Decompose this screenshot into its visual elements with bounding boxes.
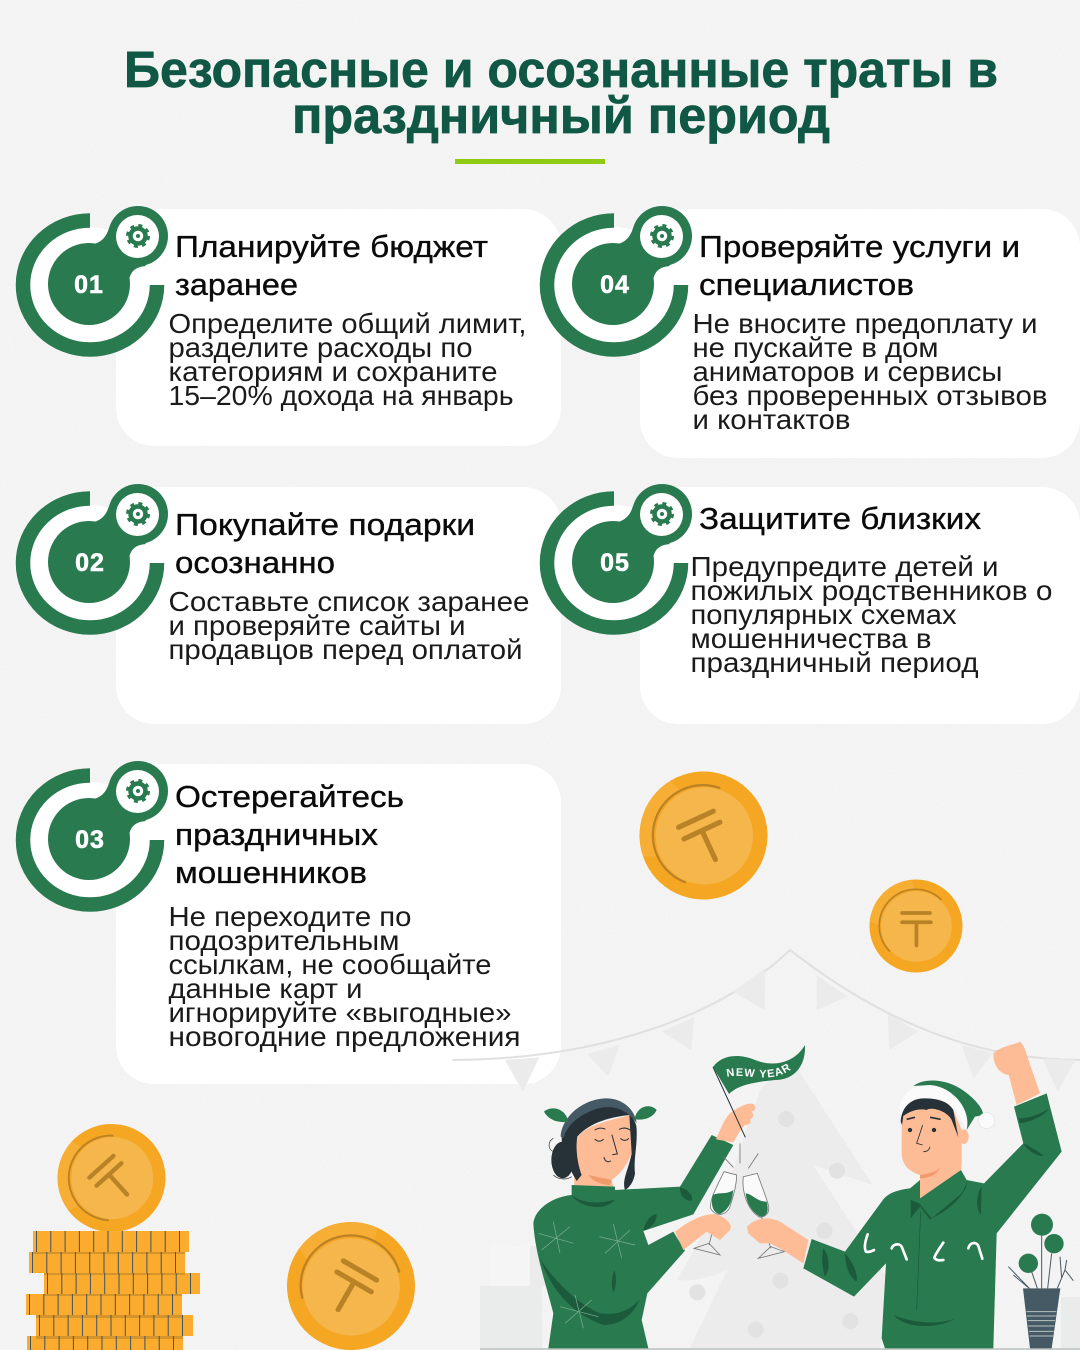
tree — [677, 1060, 888, 1348]
neck and face — [574, 1115, 633, 1187]
tree ornaments — [689, 1111, 858, 1338]
headband — [561, 1098, 637, 1138]
sweater — [533, 1135, 733, 1348]
panel: card 04 — [547, 206, 1080, 458]
heading: card 01: заранее — [175, 267, 298, 302]
text: card 03 body: игнорируйте «выгодные» — [168, 997, 512, 1028]
stems — [1008, 1233, 1073, 1288]
title — [124, 41, 998, 144]
leaves — [1019, 1214, 1064, 1273]
shirt — [803, 1093, 1062, 1348]
icon: coin stack — [26, 1231, 200, 1350]
shirt shadows — [822, 1108, 1049, 1326]
icon: badge 02: 02 — [75, 549, 105, 577]
garland with pennants — [452, 950, 1080, 1092]
text: card 04 body — [692, 308, 1048, 435]
ear leaves — [544, 1106, 657, 1122]
glass — [743, 1173, 784, 1258]
illustration: man raising glass and fist — [743, 1042, 1062, 1348]
hair — [562, 1105, 637, 1190]
heading: card 03: праздничных — [175, 817, 379, 852]
illustration: new year flag: NEW YEAR — [726, 1064, 791, 1078]
heading: card 02: осознанно — [175, 545, 335, 580]
hair — [901, 1098, 958, 1137]
raised arm — [1008, 1050, 1040, 1105]
heading: card 02: Покупайте подарки — [175, 507, 475, 542]
title: Безопасные и осознанные траты в — [124, 41, 998, 98]
panel: card 05 — [547, 484, 1080, 724]
neck shadow — [588, 1175, 612, 1185]
text: card 01 body: категориям и сохраните — [168, 356, 498, 387]
sparks — [723, 1143, 758, 1168]
illustration: potted plant — [1008, 1214, 1073, 1348]
snowflakes — [538, 1222, 635, 1328]
icon: badge 04 — [547, 206, 692, 350]
pompom — [979, 1113, 995, 1129]
text: card 03 body: подозрительным — [168, 925, 400, 956]
title: праздничный период — [292, 87, 830, 144]
text: card 05 body: популярных схемах — [690, 599, 957, 630]
santa hat white trim — [899, 1085, 973, 1130]
shirt placket — [917, 1212, 921, 1310]
illustration: new year flag — [713, 1045, 806, 1094]
clinking arm — [747, 1218, 808, 1263]
text: card 02 body: Составьте список заранее — [168, 586, 530, 617]
icon: tenge coin right — [870, 880, 962, 972]
heading: card 03: Остерегайтесь — [175, 779, 404, 814]
text: card 03 body — [168, 901, 520, 1052]
floor line — [480, 1348, 1080, 1350]
heading: card 03: мошенников — [175, 855, 367, 890]
text: card 03 body: ссылкам, не сообщайте — [168, 949, 492, 980]
icon: badge 01: 01 — [74, 271, 104, 299]
fist — [993, 1042, 1030, 1075]
heading: card 01: Планируйте бюджет — [175, 229, 488, 264]
text: card 03 body: данные карт и — [168, 973, 362, 1004]
panel: card 03 — [23, 761, 561, 1084]
text: card 04 body: и контактов — [692, 404, 850, 435]
text: card 04 body: без проверенных отзывов — [692, 380, 1048, 411]
text: card 02 body — [168, 586, 530, 665]
heading: card 04: специалистов — [699, 267, 914, 302]
hair bun — [549, 1138, 574, 1179]
heading: card 01 — [175, 229, 488, 302]
heading: card 05: Защитите близких — [699, 501, 982, 536]
vase — [1023, 1288, 1060, 1348]
text: card 02 body: и проверяйте сайты и — [168, 610, 466, 641]
icon: badge 03: 03 — [75, 826, 105, 854]
text: card 04 body: аниматоров и сервисы — [692, 356, 1002, 387]
text: card 04 body: не пускайте в дом — [692, 332, 938, 363]
heading: card 02 — [175, 507, 475, 580]
chin shadow — [920, 1168, 940, 1178]
text: card 03 body: новогодние предложения — [168, 1021, 520, 1052]
heading: card 04 — [699, 229, 1020, 302]
icon: badge 05: 05 — [600, 549, 630, 577]
candy canes — [865, 1234, 982, 1260]
lower hand — [675, 1214, 731, 1250]
illustration: festive backdrop with tree and boxes — [480, 1060, 1080, 1350]
panel: card 01 — [23, 206, 561, 446]
icon: badge 02 — [23, 484, 168, 628]
text: card 01 body — [168, 308, 526, 411]
flag pole — [713, 1067, 745, 1137]
icon: tenge coin bottom — [264, 1199, 438, 1350]
text: card 05 body: Предупредите детей и — [690, 551, 998, 582]
gift boxes — [480, 1246, 1080, 1348]
santa hat green — [913, 1081, 983, 1130]
heading: card 04: Проверяйте услуги и — [699, 229, 1020, 264]
icon: badge 03 — [23, 761, 168, 904]
text: card 03 body: Не переходите по — [168, 901, 412, 932]
text: card 05 body: праздничный период — [690, 647, 978, 678]
text: card 05 body: пожилых родственников о — [690, 575, 1052, 606]
icon: badge 05 — [547, 484, 692, 628]
heading: card 03 — [175, 779, 404, 890]
upper hand — [716, 1104, 755, 1142]
ear — [959, 1129, 969, 1144]
panel: card 02 — [23, 484, 561, 724]
sweater shadows — [540, 1187, 692, 1325]
vase stripes — [1026, 1312, 1056, 1336]
neck and head — [902, 1106, 962, 1200]
text: card 04 body: Не вносите предоплату и — [692, 308, 1038, 339]
text: card 01 body: 15–20% дохода на январь — [168, 380, 514, 411]
icon: tenge coin top — [618, 750, 789, 921]
text: card 05 body — [690, 551, 1052, 678]
glass — [694, 1172, 737, 1255]
face details — [907, 1117, 941, 1152]
text: card 02 body: продавцов перед оплатой — [168, 634, 522, 665]
face details — [595, 1128, 630, 1162]
title underline — [455, 159, 605, 164]
icon: badge 04: 04 — [600, 271, 630, 299]
icon: badge 01 — [23, 206, 168, 350]
text: card 01 body: Определите общий лимит, — [168, 308, 526, 339]
illustration: woman with flag and glass — [533, 1067, 758, 1348]
text: card 01 body: разделите расходы по — [168, 332, 472, 363]
icon: tenge coin on stack — [35, 1102, 188, 1254]
text: card 05 body: мошенничества в — [690, 623, 932, 654]
